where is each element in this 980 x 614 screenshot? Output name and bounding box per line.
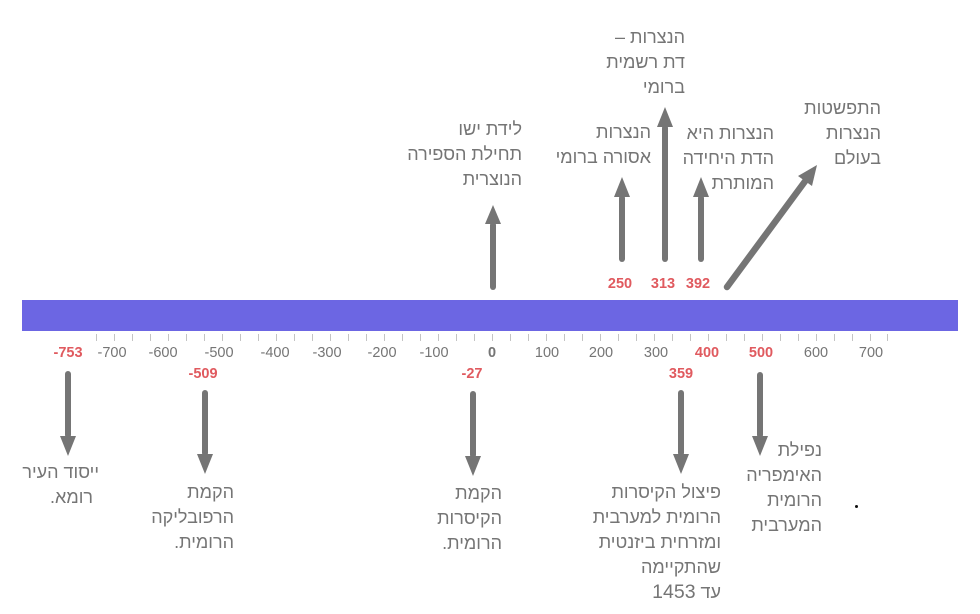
event year labels: 250 [608,276,632,292]
text: only permitted religion [683,123,774,193]
axis labels: 700 [859,345,883,361]
text: founding of Rome [22,462,99,507]
axis labels: -500 [204,345,234,361]
arrow: -27 [465,391,481,476]
text: division of the Empire: ומזרחית ביזנטית [599,532,721,552]
text: Christianity forbidden: אסורה ברומי [556,147,651,167]
text: division of the Empire: שהתקיימה [641,557,721,577]
axis labels: -600 [148,345,178,361]
arrow: 392 [693,177,709,262]
text: founding of the Republic: הקמת [187,482,234,502]
axis labels: 600 [804,345,828,361]
text: birth of Jesus: לידת ישו [458,119,522,139]
timeline bar [22,300,958,331]
event year labels: -753 [53,345,83,361]
text: founding of Rome: רומא. [50,487,93,507]
axis labels: 0 [488,345,496,361]
axis labels: -200 [367,345,397,361]
axis labels: -700 [97,345,127,361]
arrow: birth of Jesus [485,205,501,290]
text: founding of the Empire: הקמת [455,483,502,503]
text: birth of Jesus: תחילת הספירה [407,144,522,164]
text: Christianity forbidden [556,122,651,167]
text: official religion: ברומי [643,77,685,97]
axis labels [97,345,883,361]
text: division of the Empire: הרומית למערבית [593,507,721,527]
text: spread worldwide: הנצרות [826,123,881,143]
text: founding of the Empire: הרומית. [442,533,502,553]
text: founding of Rome: ייסוד העיר [22,462,99,482]
text: division of the Empire: עד 1453 [652,581,721,603]
arrow: 500 [752,372,768,456]
arrow: 250 [614,177,630,262]
text: founding of the Republic: הרומית. [174,532,234,552]
axis labels: 200 [589,345,613,361]
text: fall of the Western Empire: האימפריה [746,465,822,485]
text: birth of Jesus [407,119,522,189]
event year labels [53,276,710,382]
text: founding of the Republic: הרפובליקה [151,507,234,527]
small dot [855,505,858,508]
event year labels: -509 [188,366,218,382]
text: official religion: הנצרות – [615,27,685,47]
text: official religion [606,27,685,97]
arrow: spread of Christianity [727,165,817,287]
arrow: 359 [673,390,689,474]
arrow: 313 [657,107,673,262]
text: fall of the Western Empire: נפילת [778,440,822,460]
arrow: -509 [197,390,213,474]
text: spread worldwide: התפשטות [804,98,881,118]
text: only permitted religion: הנצרות היא [687,123,774,143]
arrow: -753 [60,371,76,456]
axis labels: -100 [419,345,449,361]
text: birth of Jesus: הנוצרית [463,169,522,189]
event year labels: 313 [651,276,675,292]
text: fall of the Western Empire: הרומית [767,490,822,510]
text: spread worldwide [804,98,881,168]
event year labels: 359 [669,366,693,382]
text: only permitted religion: הדת היחידה [683,148,774,168]
text: official religion: דת רשמית [606,52,685,72]
axis labels: 500 [749,345,773,361]
text: spread worldwide: בעולם [834,148,881,168]
axis labels: 400 [695,345,719,361]
axis labels: 300 [644,345,668,361]
axis labels: 100 [535,345,559,361]
text: fall of the Western Empire: המערבית [751,515,822,535]
text: only permitted religion: המותרת [712,173,774,193]
axis labels: -400 [260,345,290,361]
event year labels: -27 [462,366,482,382]
event year labels: 392 [686,276,710,292]
text: fall of the Western Empire [746,440,822,535]
axis labels: -300 [312,345,342,361]
text: founding of the Republic [151,482,234,552]
text: founding of the Empire [437,483,502,553]
text: division of the Empire: פיצול הקיסרות [611,482,721,502]
text: division of the Empire [593,482,721,603]
text: Christianity forbidden: הנצרות [596,122,651,142]
text: founding of the Empire: הקיסרות [437,508,502,528]
